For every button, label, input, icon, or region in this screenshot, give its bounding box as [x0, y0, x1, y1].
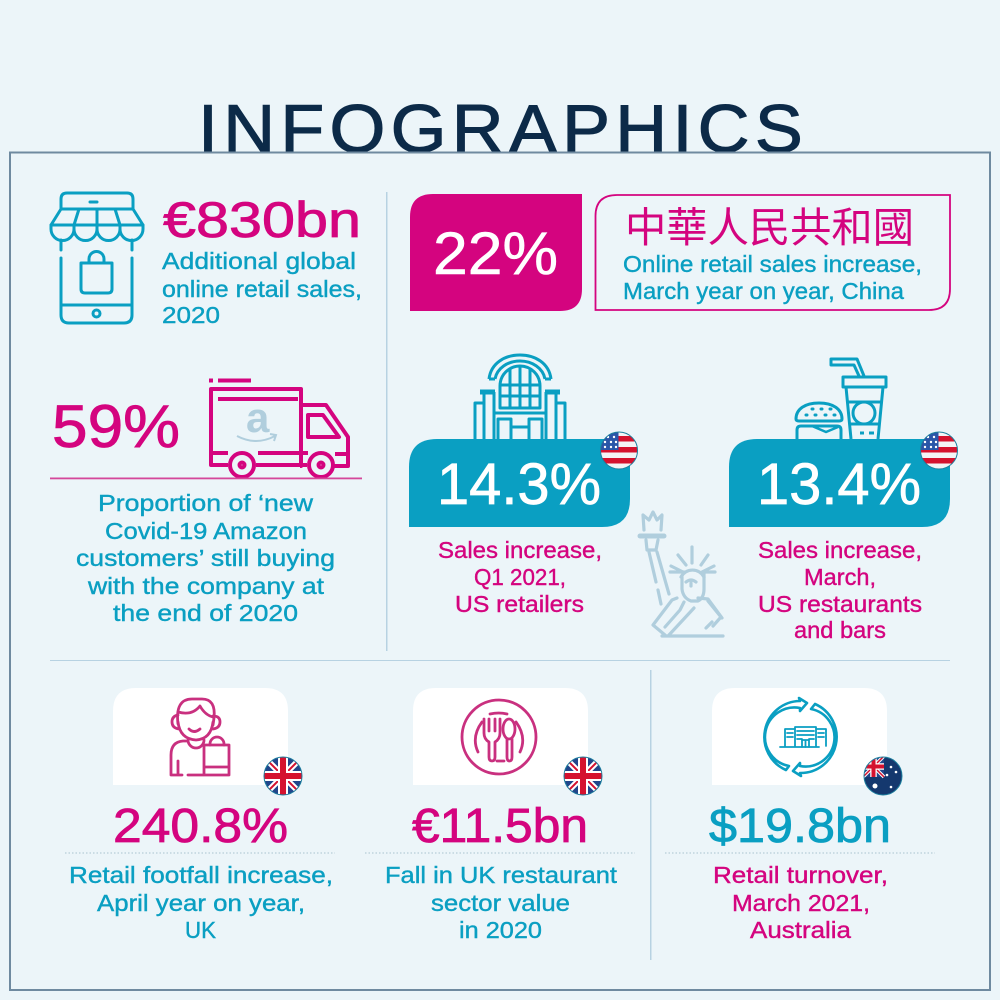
text: additional global online retail sales: 2020	[162, 302, 220, 328]
text: sales increase March: US restaurants	[758, 591, 922, 617]
icon: Amazon delivery truck: a	[246, 394, 270, 441]
badge: 13.4%	[729, 439, 950, 527]
text: sales increase Q1 2021	[438, 537, 602, 617]
text: retail turnover March 2021 Australia	[713, 862, 888, 943]
text: fall in UK restaurant sector value: Fall in UK restaurant	[385, 862, 618, 888]
text: retail footfall increase	[69, 862, 333, 943]
text: retail footfall increase: Retail footfall increase,	[69, 862, 333, 888]
text: sales increase Q1 2021: US retailers	[455, 591, 584, 617]
icon: US flag	[920, 431, 958, 470]
text: proportion of new Covid-19 Amazon customers: customers’ still buying	[76, 545, 335, 571]
panel: US retailers	[409, 355, 638, 617]
badge: 22%: 22%	[433, 220, 558, 287]
panel: UK restaurant sector	[365, 688, 635, 943]
figure: €11.5bn: €11.5bn	[412, 800, 588, 853]
panel: Amazon customers	[50, 380, 362, 626]
text: proportion of new Covid-19 Amazon customers: the end of 2020	[113, 600, 298, 626]
text: retail turnover March 2021 Australia: March 2021,	[732, 890, 870, 916]
icon: shop on a phone	[51, 193, 143, 323]
text: retail footfall increase: UK	[185, 917, 217, 943]
title: INFOGRAPHICS	[198, 91, 808, 167]
box: China online retail sales: 中華人民共和國	[625, 205, 914, 251]
icon: US flag	[600, 431, 638, 470]
figure: 59%: 59%	[52, 393, 180, 460]
icon: Statue of Liberty	[640, 512, 723, 636]
text: retail turnover March 2021 Australia: Australia	[750, 917, 851, 943]
box: China online retail sales: Online retail sales increase,	[623, 251, 922, 277]
text: sales increase March: March,	[804, 564, 876, 590]
icon card: plate and cutlery	[413, 688, 588, 785]
box: China online retail sales	[596, 195, 950, 310]
text: sales increase March: and bars	[794, 617, 886, 643]
text: sales increase March	[758, 537, 922, 643]
badge: 13.4%: 13.4%	[757, 452, 921, 517]
text: sales increase March: Sales increase,	[758, 537, 922, 563]
text: additional global online retail sales: Additional global	[162, 248, 356, 274]
panel: UK retail footfall	[65, 688, 335, 943]
figure: €830bn: €830bn	[163, 192, 361, 248]
badge: 22%	[410, 194, 582, 311]
text: additional global online retail sales	[162, 248, 362, 328]
icon: UK flag	[263, 756, 303, 796]
panel: global online retail sales	[51, 192, 362, 328]
text: retail turnover March 2021 Australia: Retail turnover,	[713, 862, 888, 888]
badge: 14.3%	[409, 439, 630, 527]
icon: burger and drink	[796, 359, 886, 439]
text: sales increase Q1 2021: Sales increase,	[438, 537, 602, 563]
text: retail footfall increase: April year on year,	[97, 890, 305, 916]
text: proportion of new Covid-19 Amazon customers	[76, 490, 335, 626]
figure: $19.8bn: $19.8bn	[709, 800, 891, 853]
text: fall in UK restaurant sector value: in 2020	[459, 917, 542, 943]
text: fall in UK restaurant sector value	[385, 862, 618, 943]
text: sales increase Q1 2021: Q1 2021,	[474, 564, 566, 590]
text: proportion of new Covid-19 Amazon customers: Covid-19 Amazon	[105, 518, 307, 544]
panel: US restaurants and bars	[729, 359, 958, 643]
text: proportion of new Covid-19 Amazon customers: with the company at	[87, 573, 325, 599]
icon: Amazon delivery truck	[209, 380, 348, 477]
text: fall in UK restaurant sector value: sector value	[431, 890, 570, 916]
icon: Australian flag	[863, 756, 903, 796]
figure: 240.8%: 240.8%	[113, 800, 288, 853]
icon: UK flag	[563, 756, 603, 796]
icon card: building with cycle arrows	[712, 688, 887, 785]
badge: 14.3%: 14.3%	[437, 452, 601, 517]
panel: Australia retail turnover	[665, 688, 935, 943]
text: additional global online retail sales: online retail sales,	[162, 276, 362, 302]
panel: China	[410, 194, 950, 311]
icon: retail building	[475, 355, 565, 439]
icon card: shopper	[113, 688, 288, 785]
text: proportion of new Covid-19 Amazon customers: Proportion of ‘new	[98, 490, 313, 516]
box: China online retail sales: March year on year, China	[623, 278, 904, 304]
